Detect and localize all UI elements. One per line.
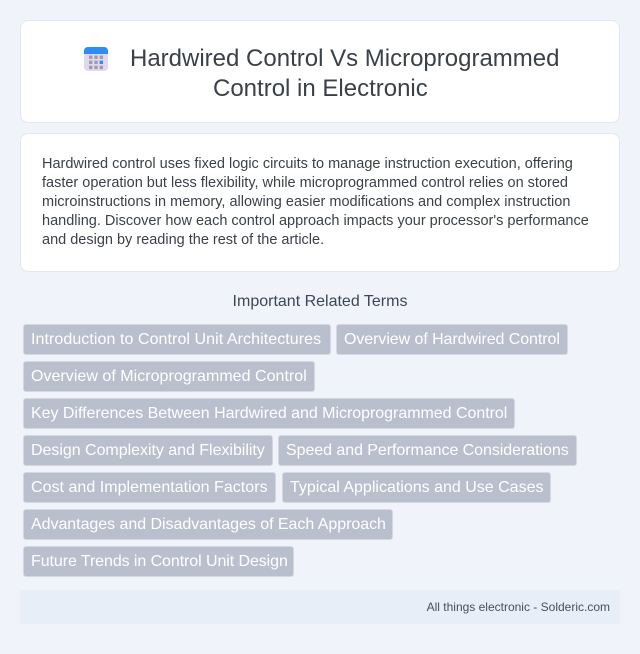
- tag: [23, 472, 276, 503]
- intro text: [42, 156, 589, 248]
- icon: calendar: [84, 47, 108, 71]
- tag: Speed and Performance Considerations: [286, 442, 569, 459]
- tag: [23, 435, 273, 466]
- tag: [23, 546, 294, 577]
- tag: Design Complexity and Flexibility: [31, 442, 265, 459]
- intro text: faster operation but less flexibility, while microprogrammed control relies on stored: [42, 175, 568, 191]
- panel: related term tags: [23, 324, 577, 577]
- tag: [23, 361, 315, 392]
- tag: [23, 324, 331, 355]
- tag: Key Differences Between Hardwired and Microprogrammed Control: [31, 405, 507, 422]
- intro text: and design by reading the rest of the article.: [42, 232, 324, 248]
- tag: Advantages and Disadvantages of Each Approach: [31, 516, 386, 533]
- title: Control in Electronic: [213, 75, 428, 102]
- panel: header: [20, 20, 620, 123]
- heading: important related terms: Important Related Terms: [233, 293, 407, 310]
- tag: [336, 324, 568, 355]
- tag: [282, 472, 551, 503]
- tag: Introduction to Control Unit Architectures: [31, 331, 321, 348]
- tag: Typical Applications and Use Cases: [290, 479, 543, 496]
- tag: Future Trends in Control Unit Design: [31, 553, 288, 570]
- title: Hardwired Control Vs Microprogrammed: [130, 45, 559, 72]
- panel: introduction: [20, 133, 620, 272]
- tag: Cost and Implementation Factors: [31, 479, 268, 496]
- tag: Overview of Microprogrammed Control: [31, 368, 307, 385]
- tag: [23, 509, 393, 540]
- intro text: handling. Discover how each control approach impacts your processor's performance: [42, 213, 589, 229]
- intro text: microinstructions in memory, allowing easier modifications and complex instruction: [42, 194, 570, 210]
- tag: Overview of Hardwired Control: [344, 331, 560, 348]
- title: [130, 45, 559, 102]
- intro text: Hardwired control uses fixed logic circuits to manage instruction execution, offering: [42, 156, 573, 172]
- footer: [20, 590, 620, 624]
- tag: [278, 435, 577, 466]
- footer text: All things electronic - Solderic.com: [427, 600, 610, 614]
- tag: [23, 398, 515, 429]
